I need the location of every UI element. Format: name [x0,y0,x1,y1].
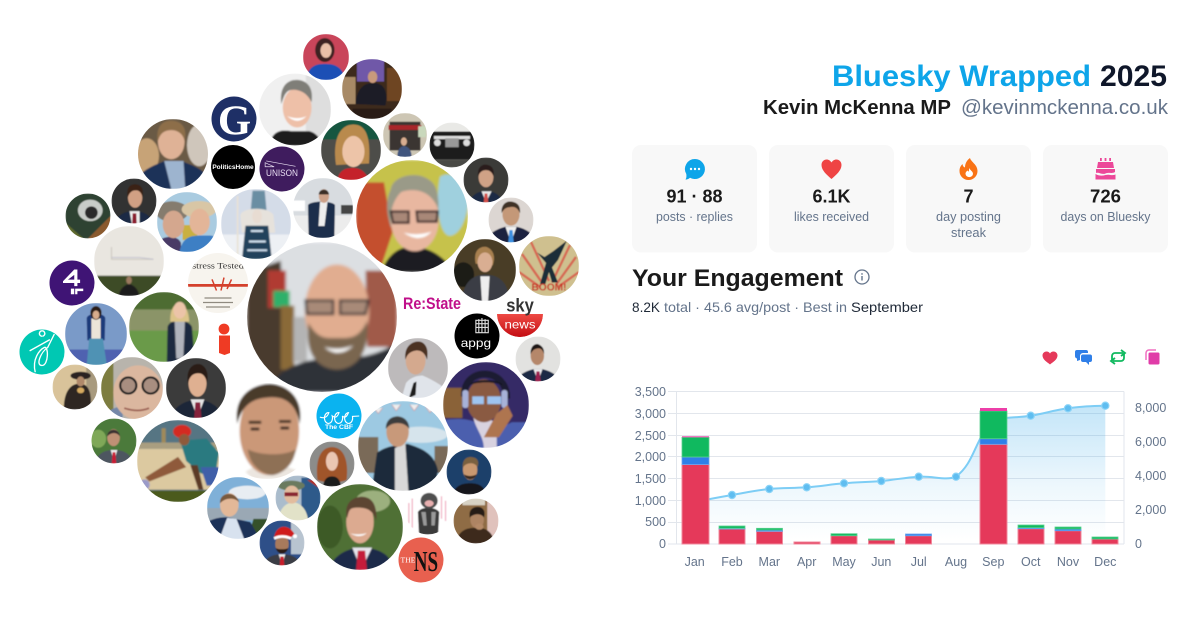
avatar: Siberian Santa figure in snow [221,189,291,259]
avatar: The CBF logo: The CBF [325,424,353,431]
avatar: BOOM comic artwork: BOOM! [531,283,567,294]
month labels: Jul [911,555,927,569]
account name and handle [763,97,1169,119]
legend: reposts [1111,350,1125,364]
account name and handle: @kevinmckenna.co.uk [961,97,1169,119]
avatar: man in grey suit in garden [90,418,136,464]
engagement summary: total · 45.6 avg/post · Best in [664,299,847,315]
right axis labels: 6,000 [1135,435,1166,449]
avatar: man in navy blazer [134,119,212,189]
avatar: grey man with black tie [388,338,448,398]
panel: days on Bluesky stat [1043,145,1168,252]
right axis labels: 8,000 [1135,401,1166,415]
left axis labels: 1,000 [635,494,666,508]
left axis labels: 2,000 [635,450,666,464]
legend: likes [1042,352,1058,364]
avatar: APPG logo [454,314,500,358]
left axis labels: 3,500 [635,385,666,399]
stat value: 7 [963,186,974,206]
avatar: UNISON logo [260,146,304,192]
avatar: two older women in hats [156,192,217,252]
month labels: Mar [759,555,780,569]
avatar: woman in blue dress [65,303,127,365]
month labels [685,555,1116,569]
avatar: New Statesman logo: NS [414,547,438,578]
heading: Your Engagement: Your Engagement [632,265,843,292]
engagement summary: 8.2K [632,299,661,315]
avatar: man in suit under bunting [358,401,448,491]
avatar: teal dancer logo [20,330,64,374]
avatar: blonde woman by canal [129,292,199,362]
avatar: PoliticsHome logo: PoliticsHome [212,164,254,171]
grid lines [668,392,1124,544]
legend: replies [1075,350,1092,365]
panel: avatar bubble cluster [20,34,579,582]
title: Bluesky Wrapped [832,60,1091,93]
title: 2025 [1100,60,1167,93]
stat label: posts · replies [656,210,733,224]
bars: likes [682,444,1118,544]
avatar: cut-out face of man with stubble [235,383,302,479]
month labels: May [832,555,857,569]
stat value: 91 · 88 [666,186,722,206]
stat label: likes received [794,210,869,224]
avatar: woman with short grey hair [259,74,331,146]
avatar: Guardian logo: G [218,97,251,144]
avatar: man in navy jacket in car park [293,178,353,238]
avatar: Channel 4 logo [50,260,94,306]
avatar: cartoon figure with pink lines [406,490,450,534]
stat label: streak [951,226,987,240]
logo: i newspaper mark [219,324,230,355]
avatar: man in Santa hat [260,520,304,566]
avatar: man with blue tie [488,198,534,242]
legend: quotes [1146,350,1160,364]
avatar: Sky News logo: news [504,317,536,331]
avatar: APPG logo: appg [461,337,491,350]
stat value: 726 [1090,186,1121,206]
avatar: shop front [383,113,427,157]
month labels: Jun [871,555,891,569]
month labels: Jan [685,555,705,569]
avatar: Stress Tested book cover [188,253,248,313]
engagement summary: September [851,299,923,315]
avatar: man with hand on chin [454,498,498,544]
bars: reposts [682,411,1118,540]
left axis labels [635,385,666,551]
panel: posts and replies stat [632,145,757,252]
month labels: Apr [797,555,816,569]
left axis labels: 1,500 [635,472,666,486]
avatar: Sky News logo [497,294,543,337]
logo: Re:State wordmark: Re:State [403,294,461,313]
stat label: day posting [936,210,1001,224]
avatar: BOOM comic artwork [519,236,579,296]
month labels: Feb [721,555,743,569]
area under cumulative line [695,406,1105,544]
cumulative line [695,406,1105,502]
avatar: person in dark hat [52,364,98,410]
left axis labels: 0 [659,537,666,551]
avatar: man on stage [342,59,402,119]
avatar: man with maroon tie on light grey [516,336,560,382]
avatar: young man with maroon tie [166,358,226,418]
avatar: man in green hat and red sunglasses [276,476,320,520]
avatar: presentation slide with speaker [94,226,164,296]
avatar: cassette tape [430,122,474,168]
left axis labels: 500 [645,515,666,529]
avatar: woman in blue on red [303,34,349,80]
avatar: grey-haired woman with glasses on yellow mural [356,160,468,272]
bars: replies [682,439,1081,536]
month labels: Sep [982,555,1004,569]
avatar: woman with curly red hair [310,442,354,486]
avatar: large bearded man with glasses on high street [247,242,397,392]
icon: birthday cake [1096,158,1116,180]
stat label [936,210,1001,240]
left axis labels: 2,500 [635,429,666,443]
avatar: man with blue sky [207,477,269,539]
icon: heart [822,160,842,179]
icon: flame [960,158,978,180]
avatar: man with headphones resting chin on hand [443,362,529,448]
icon: info [855,270,869,284]
avatar: man in black tee on blue code background [446,450,492,494]
avatar: man with burgundy tie [112,178,156,224]
chart legend icons [1042,350,1160,365]
icon: speech bubble [685,159,705,180]
month labels: Aug [945,555,967,569]
panel: posting streak stat [906,145,1031,252]
month labels: Nov [1057,555,1080,569]
account name and handle: Kevin McKenna MP [763,97,951,119]
avatar: The CBF logo [316,394,362,438]
avatar: Stress Tested book cover: stress Tested [192,262,244,271]
month labels: Oct [1021,555,1041,569]
right axis labels [1135,401,1166,551]
avatar: green-fronted woman with auburn hair [321,120,381,180]
avatar: woman at conference table [452,239,516,301]
avatar: man in navy suit on dark grey [464,158,508,202]
engagement summary [632,299,923,315]
avatar: Sky News logo: sky [506,294,534,315]
right axis labels: 0 [1135,537,1142,551]
bars: quotes [682,408,1007,437]
chart: monthly engagement stacked bars with cumulative line [635,385,1166,569]
avatar: athlete lawn bowling [137,420,219,502]
right axis labels: 4,000 [1135,469,1166,483]
right axis labels: 2,000 [1135,503,1166,517]
stat label: days on Bluesky [1060,210,1151,224]
avatar: man in navy suit with red tie among trees [317,484,403,570]
line points [728,402,1109,499]
avatar: older man with round glasses close-up [101,357,163,420]
avatar: UNISON logo: UNISON [266,168,298,179]
avatar: New Statesman logo [398,538,444,582]
avatar: PoliticsHome logo [211,145,255,189]
stat value: 6.1K [812,186,850,206]
left axis labels: 3,000 [635,407,666,421]
month labels: Dec [1094,555,1116,569]
avatar: dog [66,194,110,238]
avatar: New Statesman logo: THE [401,555,416,564]
panel: likes stat [769,145,894,252]
